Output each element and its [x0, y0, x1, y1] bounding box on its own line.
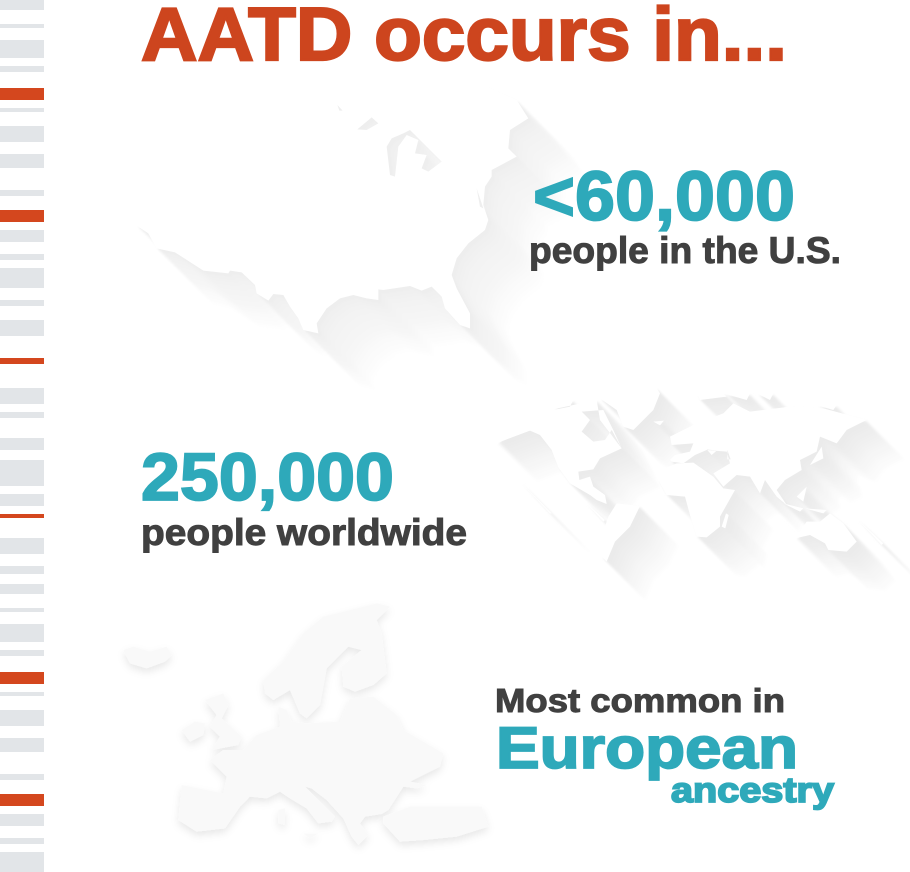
map: Europe: [123, 603, 488, 845]
stat: European ancestry: ancestry: [671, 771, 835, 810]
map: world with long shadow: [497, 388, 910, 602]
map: United States with long shadow: [127, 83, 585, 390]
stat: worldwide: people worldwide: [141, 512, 467, 553]
stat: European ancestry: [495, 682, 835, 810]
left stripe column: [0, 0, 44, 872]
stat: U.S.: <60,000: [533, 157, 795, 235]
stat: European ancestry: European: [496, 716, 798, 781]
stat: European ancestry: Most common in: [495, 682, 785, 719]
stat: worldwide: 250,000: [141, 440, 394, 515]
stat: U.S.: people in the U.S.: [529, 230, 841, 271]
stat: U.S.: [529, 157, 841, 271]
stat: worldwide: [141, 440, 467, 553]
